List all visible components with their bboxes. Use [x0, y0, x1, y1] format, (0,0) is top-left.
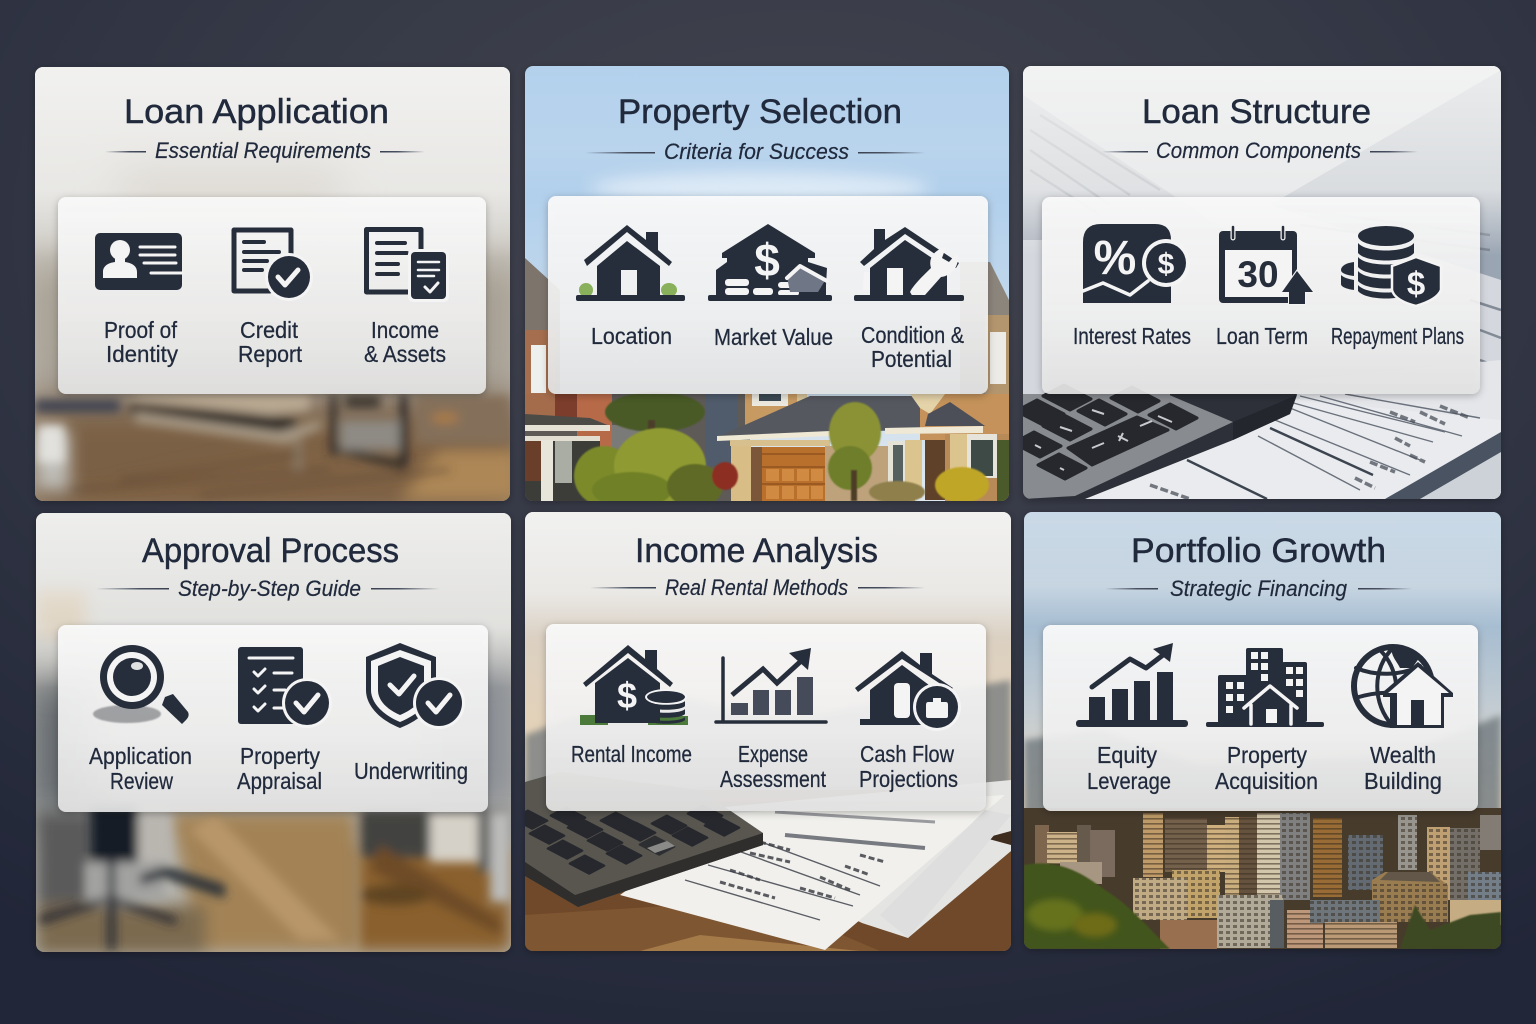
label: Loan Term: Loan Term — [1216, 323, 1308, 349]
label: Income & Assets: & Assets — [364, 341, 446, 367]
label: Proof of Identity: Proof of — [104, 317, 178, 343]
heading: Property Selection — [585, 93, 925, 164]
label: Condition & Potential: Potential — [871, 346, 952, 372]
inner panel: Loan Structure components — [1042, 197, 1480, 394]
icon: rental income house: $ — [617, 675, 637, 716]
label: Application Review: Review — [110, 768, 173, 794]
label: Wealth Building: Building — [1364, 768, 1442, 794]
label: Proof of Identity — [104, 317, 178, 367]
heading: Loan Structure: Common Components — [1156, 138, 1361, 163]
label: Market Value: Market Value — [714, 324, 833, 350]
icon: repayment plans coins: $ — [1407, 265, 1425, 302]
icon: cash flow house — [855, 651, 961, 731]
icon: expense chart — [716, 648, 826, 722]
icon: house location — [576, 225, 685, 301]
icon: magnifying glass — [93, 645, 189, 724]
label: Interest Rates: Interest Rates — [1073, 323, 1191, 349]
panel: Portfolio Growth — [1024, 512, 1501, 949]
icon: repayment plans coins — [1341, 226, 1441, 306]
inner panel: Approval Process steps — [58, 625, 488, 812]
heading: Loan Application — [105, 93, 425, 163]
inner panel: Portfolio Growth strategies — [1043, 625, 1478, 811]
inner panel: Income Analysis methods — [546, 624, 986, 811]
label: Equity Leverage: Equity — [1097, 742, 1157, 768]
heading: Property Selection: Property Selection — [618, 93, 902, 131]
panel: Property Selection — [525, 66, 1009, 508]
icon: wealth globe with house — [1354, 646, 1453, 728]
label: Proof of Identity: Identity — [106, 341, 178, 367]
label: Credit Report — [238, 317, 303, 367]
panel: Loan Application — [34, 67, 511, 504]
heading: Loan Application: Loan Application — [124, 93, 389, 131]
label: Income & Assets: Income — [371, 317, 439, 343]
label: Cash Flow Projections: Projections — [859, 766, 958, 792]
label: Rental Income: Rental Income — [571, 741, 692, 767]
label: Property Appraisal: Property — [240, 743, 320, 769]
label: Expense Assessment: Expense — [738, 741, 808, 767]
label: Cash Flow Projections — [859, 741, 958, 792]
label: Property Appraisal: Appraisal — [237, 768, 322, 794]
label: Location: Location — [591, 323, 672, 349]
heading: Approval Process: Approval Process — [142, 532, 399, 570]
label: Wealth Building: Wealth — [1370, 742, 1436, 768]
heading: Loan Application: Essential Requirements — [155, 138, 371, 163]
label: Condition & Potential — [861, 322, 964, 372]
icon: interest rates: % — [1094, 232, 1136, 285]
label: Property Acquisition — [1215, 742, 1318, 794]
icon: shield with check — [366, 643, 465, 729]
icon: income and assets documents — [366, 230, 449, 302]
heading: Approval Process: Step-by-Step Guide — [178, 576, 361, 601]
label: Credit Report: Report — [238, 341, 303, 367]
heading: Income Analysis: Real Rental Methods — [665, 575, 848, 600]
label: Cash Flow Projections: Cash Flow — [860, 741, 954, 767]
icon: market value house with dollar — [708, 224, 832, 301]
icon: equity bar chart with arrow — [1076, 643, 1188, 727]
heading: Loan Structure: Loan Structure — [1142, 93, 1371, 131]
icon: property acquisition buildings — [1206, 648, 1324, 727]
label: Equity Leverage — [1087, 742, 1171, 794]
panel: Approval Process — [30, 513, 520, 955]
label: Property Acquisition: Property — [1227, 742, 1307, 768]
label: Property Acquisition: Acquisition — [1215, 768, 1318, 794]
label: Underwriting: Underwriting — [354, 758, 468, 784]
icon: ID card — [95, 233, 182, 290]
icon: interest rates — [1083, 224, 1190, 303]
label: Expense Assessment: Assessment — [720, 766, 827, 792]
heading: Portfolio Growth — [1105, 532, 1412, 601]
label: Income & Assets — [364, 317, 446, 367]
panel: Income Analysis — [513, 512, 1011, 951]
heading: Approval Process — [96, 532, 440, 601]
icon: loan term calendar: 30 — [1237, 254, 1279, 295]
icon: market value house with dollar: $ — [754, 234, 780, 286]
icon: loan term calendar — [1219, 226, 1315, 305]
label: Application Review: Application — [89, 743, 192, 769]
heading: Loan Structure — [1102, 93, 1418, 163]
heading: Portfolio Growth: Strategic Financing — [1170, 576, 1348, 601]
panel: Loan Structure — [1013, 66, 1501, 499]
label: Application Review — [89, 743, 192, 794]
label: Expense Assessment — [720, 741, 827, 792]
inner panel: Property Selection criteria — [548, 196, 988, 394]
heading: Income Analysis: Income Analysis — [635, 532, 878, 570]
heading: Income Analysis — [590, 532, 925, 600]
heading: Portfolio Growth: Portfolio Growth — [1131, 532, 1386, 570]
icon: rental income house — [580, 645, 688, 725]
label: Condition & Potential: Condition & — [861, 322, 964, 348]
label: Property Appraisal — [237, 743, 322, 794]
label: Credit Report: Credit — [240, 317, 299, 343]
label: Equity Leverage: Leverage — [1087, 768, 1171, 794]
icon: interest rates: $ — [1158, 248, 1175, 281]
icon: property appraisal checklist — [238, 647, 332, 728]
heading: Property Selection: Criteria for Success — [664, 139, 849, 164]
label: Wealth Building — [1364, 742, 1442, 794]
label: Repayment Plans: Repayment Plans — [1331, 323, 1464, 349]
icon: credit report — [234, 230, 313, 301]
inner panel: Loan Application requirements — [58, 197, 486, 394]
icon: house with wrench — [854, 227, 964, 301]
